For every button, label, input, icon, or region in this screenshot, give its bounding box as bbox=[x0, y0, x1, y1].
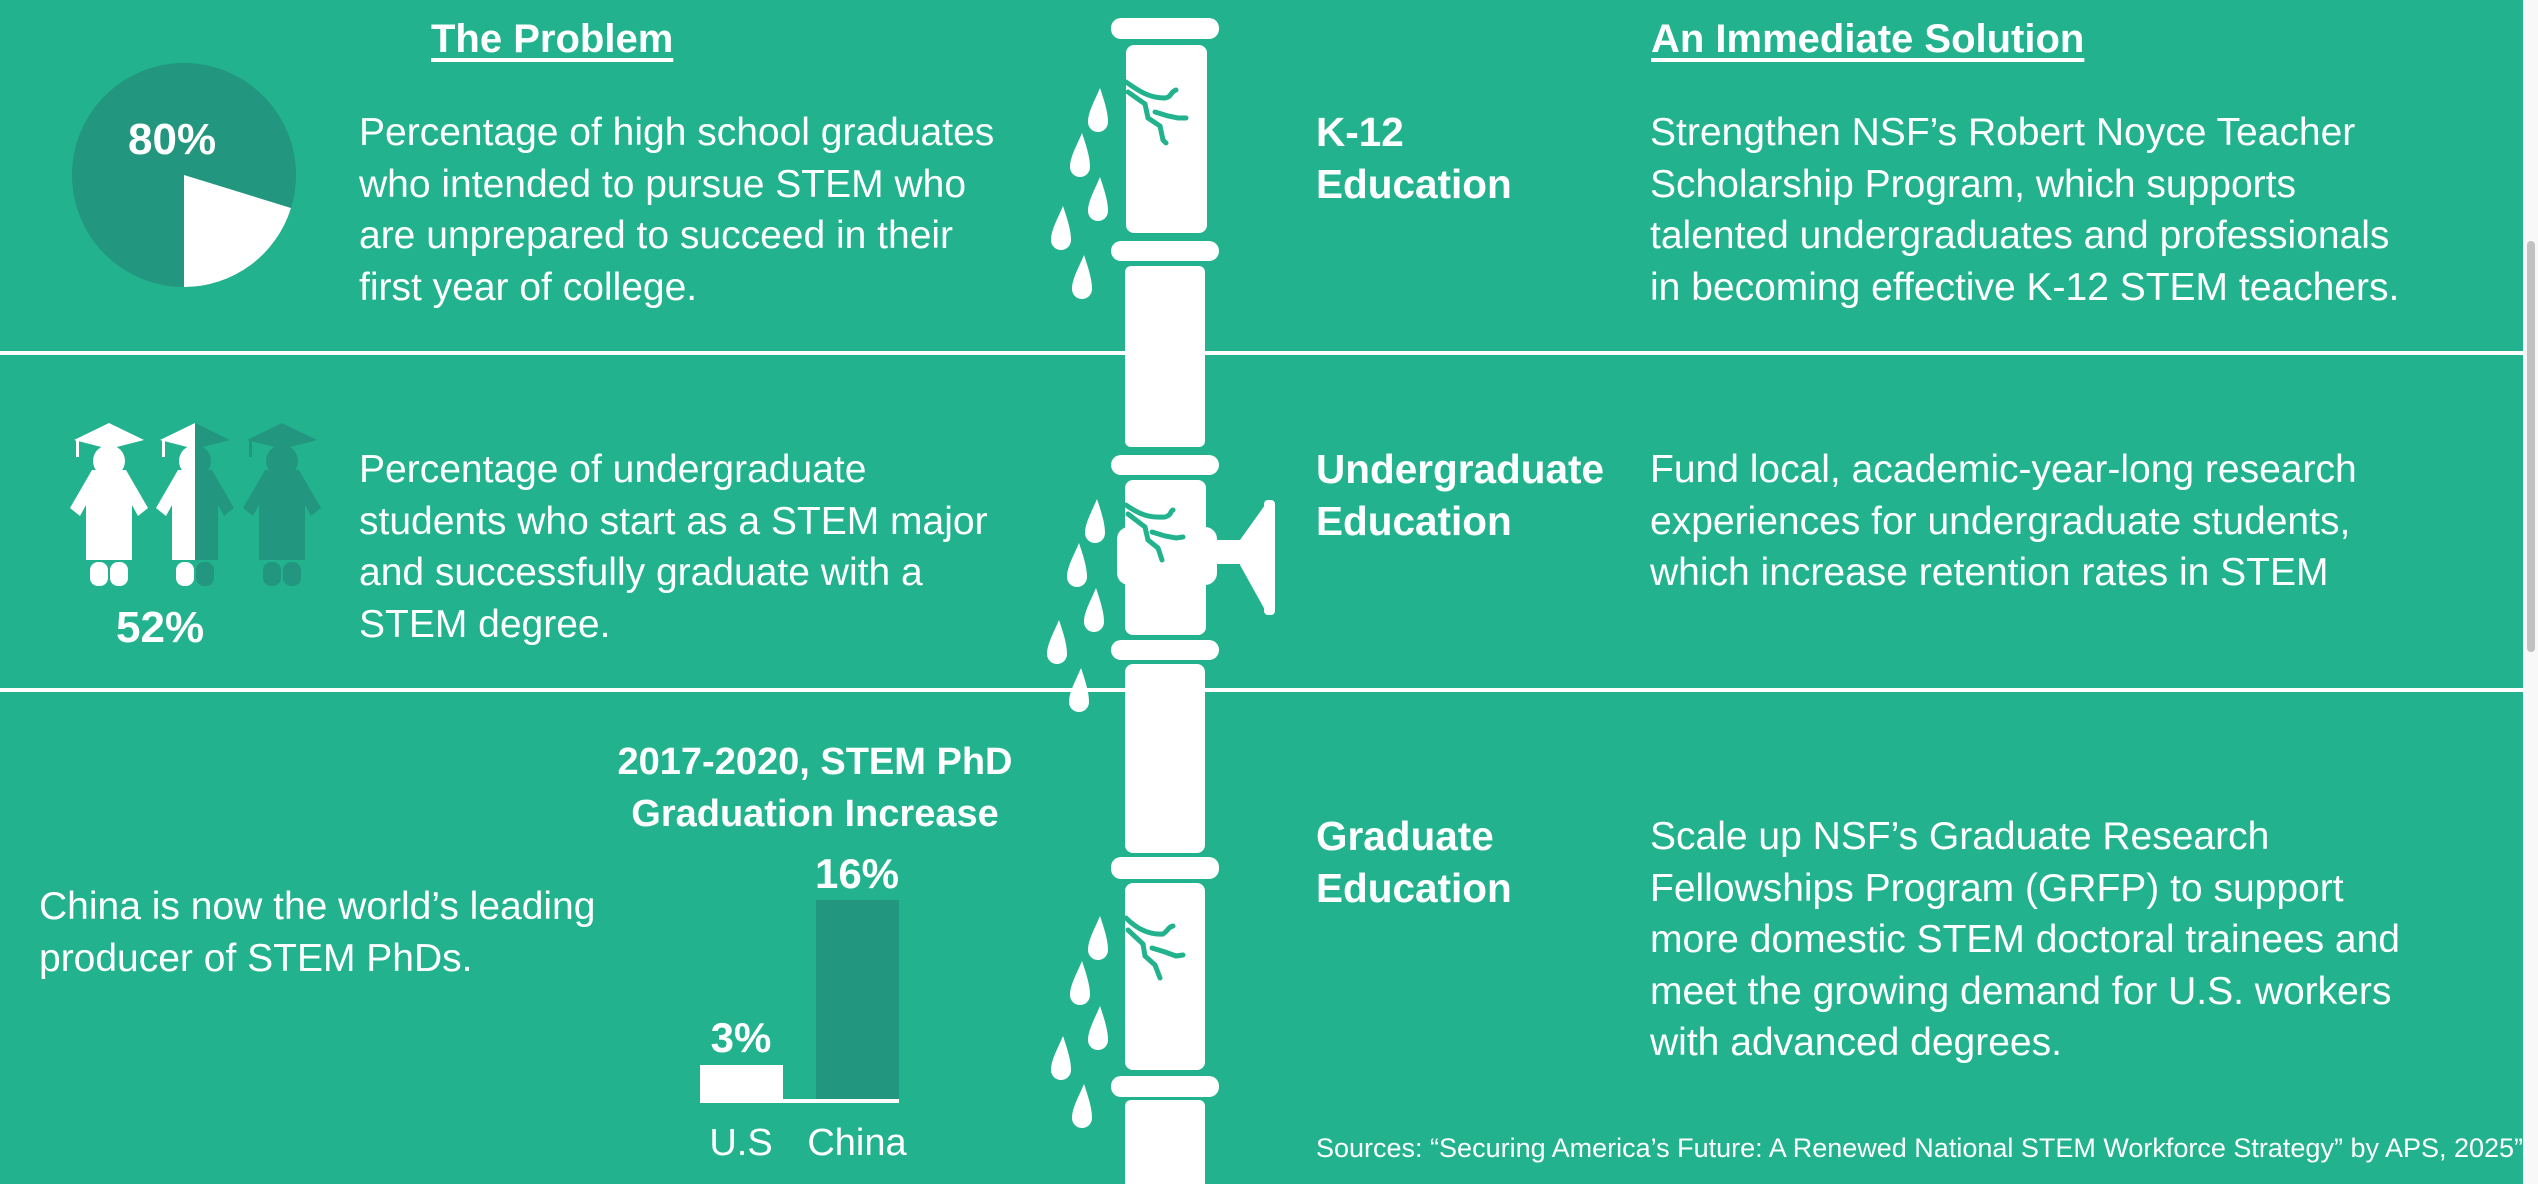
heading: K-12 Education: K-12 bbox=[1316, 109, 1404, 155]
sources: Sources: “Securing America’s Future: A Renewed National STEM Workforce Strategy” by APS, 2025” bbox=[1316, 1133, 2523, 1163]
text: solution 1: Strengthen NSF’s Robert Noyce Teacher bbox=[1650, 111, 2355, 154]
bar chart: 3% bbox=[711, 1014, 771, 1061]
pipe cracks bbox=[1126, 82, 1186, 978]
text: solution 1: talented undergraduates and professionals bbox=[1650, 214, 2389, 257]
text: problem 3 bbox=[39, 885, 595, 980]
bar chart: U.S bbox=[709, 1122, 773, 1164]
heading: Undergraduate Education: Education bbox=[1316, 498, 1512, 544]
text: problem 1: are unprepared to succeed in their bbox=[359, 214, 953, 257]
icon: graduates bbox=[70, 423, 321, 586]
text: problem 1: who intended to pursue STEM who bbox=[359, 162, 966, 206]
text: solution 2: which increase retention rates in STEM bbox=[1650, 551, 2328, 594]
pie label 80%: 80% bbox=[128, 115, 216, 164]
text: solution 3: with advanced degrees. bbox=[1650, 1021, 2062, 1064]
text: problem 3: China is now the world’s leading bbox=[39, 885, 595, 928]
chart title: Graduation Increase bbox=[631, 792, 999, 834]
heading: Graduate Education: Graduate bbox=[1316, 813, 1494, 859]
bar chart: 16% bbox=[815, 850, 899, 897]
pie chart 80% bbox=[72, 63, 296, 287]
text: problem 3: producer of STEM PhDs. bbox=[39, 936, 472, 980]
text: solution 3: Fellowships Program (GRFP) to support bbox=[1650, 866, 2344, 910]
heading: K-12 Education: Education bbox=[1316, 160, 1512, 206]
text: solution 3: more domestic STEM doctoral trainees and bbox=[1650, 918, 2400, 961]
text: problem 2: STEM degree. bbox=[359, 602, 610, 646]
heading: Undergraduate Education: Undergraduate bbox=[1316, 446, 1604, 492]
text: solution 3: Scale up NSF’s Graduate Research bbox=[1650, 815, 2269, 858]
text: problem 2: students who start as a STEM major bbox=[359, 500, 988, 542]
text: problem 2 bbox=[359, 448, 988, 646]
chart title: 2017-2020, STEM PhD bbox=[618, 741, 1012, 783]
text: solution 3 bbox=[1650, 815, 2400, 1064]
text: solution 2: experiences for undergraduate students, bbox=[1650, 500, 2350, 542]
text: solution 1: Scholarship Program, which supports bbox=[1650, 162, 2296, 206]
pipe bbox=[1111, 18, 1275, 1184]
water drops bbox=[1047, 88, 1108, 1128]
heading: Graduate Education: Education bbox=[1316, 864, 1512, 910]
text: problem 1: first year of college. bbox=[359, 266, 697, 308]
text: solution 1 bbox=[1650, 111, 2399, 308]
bar chart: China bbox=[807, 1122, 908, 1164]
text: solution 1: in becoming effective K-12 STEM teachers. bbox=[1650, 266, 2399, 308]
text: solution 2 bbox=[1650, 448, 2357, 594]
chart title bbox=[618, 741, 1012, 834]
text: problem 2: Percentage of undergraduate bbox=[359, 448, 866, 491]
graphics layer bbox=[70, 18, 1275, 1184]
scrollbar track bbox=[2523, 0, 2538, 1184]
heading: Undergraduate Education bbox=[1316, 446, 1604, 544]
text: problem 1 bbox=[359, 111, 994, 308]
text: problem 1: Percentage of high school graduates bbox=[359, 111, 994, 154]
text: solution 2: Fund local, academic-year-long research bbox=[1650, 448, 2357, 491]
bar chart bbox=[700, 850, 908, 1164]
title: The Problem: The Problem bbox=[431, 17, 673, 61]
heading: K-12 Education bbox=[1316, 109, 1512, 206]
heading: Graduate Education bbox=[1316, 813, 1512, 910]
text: solution 3: meet the growing demand for U.S. workers bbox=[1650, 970, 2391, 1012]
text: 52%: 52% bbox=[116, 603, 204, 652]
text: problem 2: and successfully graduate with a bbox=[359, 551, 923, 594]
title: An Immediate Solution: An Immediate Solution bbox=[1651, 17, 2084, 61]
